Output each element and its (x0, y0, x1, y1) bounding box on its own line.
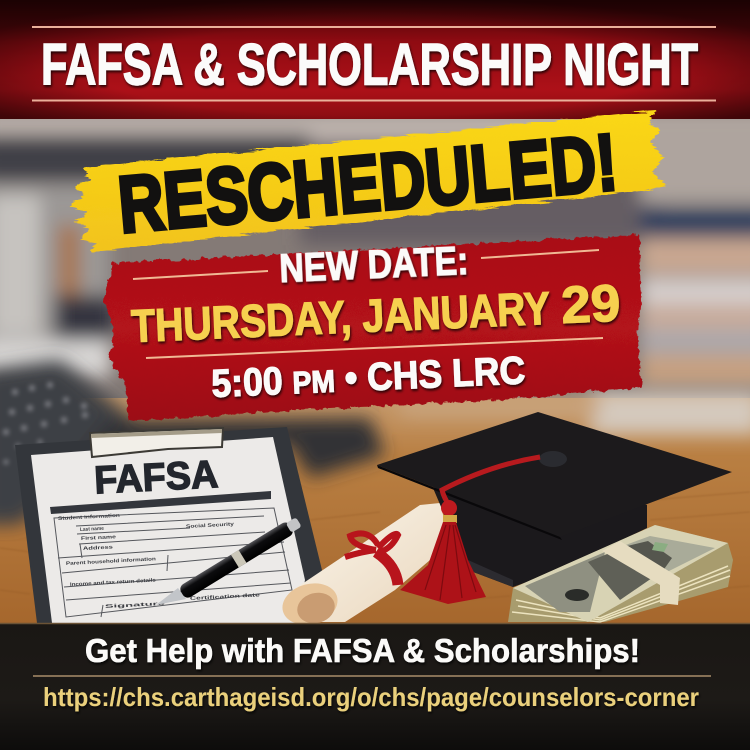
footer heading: Get Help with FAFSA & Scholarships! (85, 632, 640, 669)
red ribbon (345, 533, 398, 585)
yellow RESCHEDULED banner (70, 111, 666, 252)
clipboard with FAFSA form (15, 427, 322, 623)
new date left rule (133, 271, 268, 279)
divider rule (146, 338, 603, 358)
top bill (513, 525, 728, 622)
form small text (58, 513, 260, 610)
form small text: First name (81, 534, 116, 542)
new date label: NEW DATE: (278, 239, 469, 291)
form small text: Social Security (186, 521, 234, 530)
form small text: Address (83, 544, 113, 552)
desk wood streaks (0, 492, 750, 600)
red date panel (104, 235, 642, 421)
tassel (400, 457, 540, 604)
pen (156, 516, 303, 605)
form small text: Certification date (190, 592, 260, 602)
footer URL: https://chs.carthageisd.org/o/chs/page/counselors-corner (43, 682, 699, 712)
form small text: Student information (58, 513, 120, 522)
FAFSA form heading: FAFSA (93, 453, 219, 502)
graduation cap (377, 412, 732, 604)
clipboard clip (90, 428, 223, 457)
form small text: Income and tax return details (70, 577, 156, 588)
new date right rule (481, 250, 599, 258)
cap button (539, 451, 567, 467)
diploma scroll with ribbon (278, 503, 447, 631)
date text: THURSDAY, JANUARY (130, 282, 551, 352)
form small text: Parent household information (66, 556, 156, 567)
header band (0, 0, 750, 119)
form heading bar (50, 491, 271, 514)
date text: 29 (560, 274, 621, 335)
RESCHEDULED heading: RESCHEDULED! (115, 117, 621, 249)
time and location: 5:00 PM • CHS LRC (211, 349, 526, 406)
stack of dollar bills (508, 525, 733, 622)
footer band (0, 623, 750, 750)
form small text: Last name (80, 526, 104, 533)
keyboard keys (3, 382, 88, 464)
form fields (54, 508, 292, 617)
money strap (602, 541, 680, 605)
blurred background: desk, books and keyboard (0, 110, 750, 630)
form small text: Signature (105, 601, 166, 610)
form paper (31, 437, 305, 623)
